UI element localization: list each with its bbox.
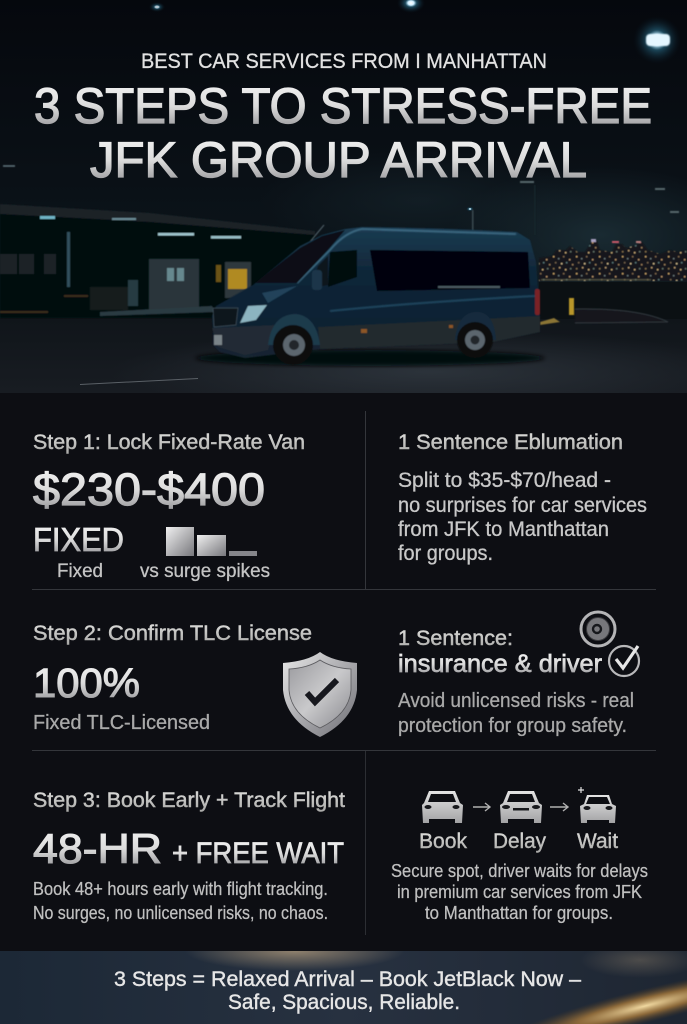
headlight	[240, 305, 267, 323]
explanation body: for groups.	[398, 542, 493, 565]
explanation heading line 1: 1 Sentence:	[398, 626, 513, 650]
yellow bollard and curb	[540, 298, 668, 325]
step 2 heading: Step 2: Confirm TLC License	[33, 621, 312, 645]
far embankment	[539, 282, 687, 319]
panel: step 3	[33, 788, 345, 923]
lower trim	[318, 316, 540, 349]
explanation body: Split to $35-$70/head -	[398, 469, 611, 492]
footer text line 1: 3 Steps = Relaxed Arrival – Book JetBlack Now –	[114, 967, 581, 991]
footer banner	[0, 951, 687, 1024]
antenna	[309, 225, 324, 243]
step 3 body: Book 48+ hours early with flight tracking.	[33, 878, 328, 899]
label: wait: Wait	[577, 829, 618, 853]
bar chart: fixed vs surge	[166, 527, 257, 556]
caption: vs surge spikes: vs surge spikes	[140, 560, 270, 582]
explanation body: protection for group safety.	[398, 714, 627, 737]
fixed label: FIXED	[33, 521, 124, 558]
footer text line 2: Safe, Spacious, Reliable.	[228, 990, 460, 1014]
hero photo: night airport scene with van	[0, 0, 687, 414]
title block	[34, 50, 652, 188]
main title line 1: 3 STEPS TO STRESS-FREE	[34, 78, 652, 134]
label: book: Book	[419, 829, 467, 853]
tail light	[535, 289, 540, 315]
process body	[391, 860, 648, 923]
main title line 2: JFK GROUP ARRIVAL	[90, 132, 587, 188]
panel: step 3 process	[391, 787, 648, 923]
city skyline	[539, 239, 687, 281]
lamp poles	[472, 181, 679, 235]
panel: step 2 explanation	[398, 612, 639, 737]
icon: shield with check	[283, 652, 357, 737]
process body: in premium car services from JFK	[397, 881, 643, 902]
terminal building	[0, 204, 315, 318]
window sill highlight	[438, 286, 500, 288]
explanation heading: 1 Sentence Eblumation	[398, 430, 623, 454]
label: delay: Delay	[493, 829, 546, 853]
roof highlight	[297, 229, 516, 283]
mirror	[312, 270, 322, 290]
front wheel arch	[268, 314, 320, 345]
license plate	[214, 335, 222, 345]
explanation body: from JFK to Manthattan	[398, 518, 609, 541]
arrow	[473, 803, 490, 811]
arrow	[550, 803, 568, 811]
front wheel	[273, 325, 313, 365]
grille	[213, 308, 238, 327]
side windows	[370, 250, 530, 291]
step 1 heading: Step 1: Lock Fixed-Rate Van	[33, 430, 305, 454]
van	[195, 225, 545, 366]
content panel background	[0, 393, 687, 951]
explanation body	[398, 689, 634, 737]
door window	[328, 250, 357, 287]
hood highlight	[262, 286, 297, 303]
eyebrow heading: BEST CAR SERVICES FROM I MANHATTAN	[141, 50, 547, 73]
icon: car delay	[500, 791, 542, 823]
step 3 heading: Step 3: Book Early + Track Flight	[33, 788, 345, 812]
ground marking	[80, 378, 198, 385]
rear wheel arch	[455, 312, 496, 340]
step 3 body	[33, 878, 328, 923]
rear wheel	[457, 322, 493, 358]
street lights glow	[3, 0, 681, 212]
marker lights	[361, 329, 367, 333]
panel: step 1	[33, 430, 305, 582]
explanation body: Avoid unlicensed risks - real	[398, 689, 634, 712]
explanation body: no surprises for car services	[398, 494, 647, 517]
stat caption: Fixed TLC-Licensed	[33, 711, 210, 734]
explanation body	[398, 469, 647, 565]
process body: Secure spot, driver waits for delays	[391, 860, 648, 881]
step 3 body: No surges, no unlicensed risks, no chaos.	[33, 902, 328, 923]
price range: $230-$400	[33, 464, 265, 515]
caption: fixed: Fixed	[57, 560, 103, 582]
side character line	[330, 296, 535, 311]
free wait stat: + FREE WAIT	[172, 837, 344, 870]
vent window	[317, 256, 329, 286]
explanation heading line 2: insurance & driver	[398, 650, 602, 678]
48-hour stat: 48-HR	[33, 825, 162, 872]
van shadow	[195, 350, 545, 366]
100 percent stat: 100%	[33, 660, 140, 706]
panel: step 2	[33, 621, 357, 737]
bumper	[212, 325, 276, 355]
icon: car wait	[578, 787, 616, 823]
panel: step 1 explanation	[398, 430, 647, 565]
ground	[0, 372, 687, 393]
asphalt light	[208, 344, 652, 393]
van body	[212, 227, 540, 358]
windshield	[255, 230, 345, 283]
process body: to Manthattan for groups.	[425, 902, 613, 923]
icon: car book	[422, 791, 463, 823]
icon: check circle	[609, 646, 639, 676]
icon: insurance seal	[581, 612, 615, 646]
